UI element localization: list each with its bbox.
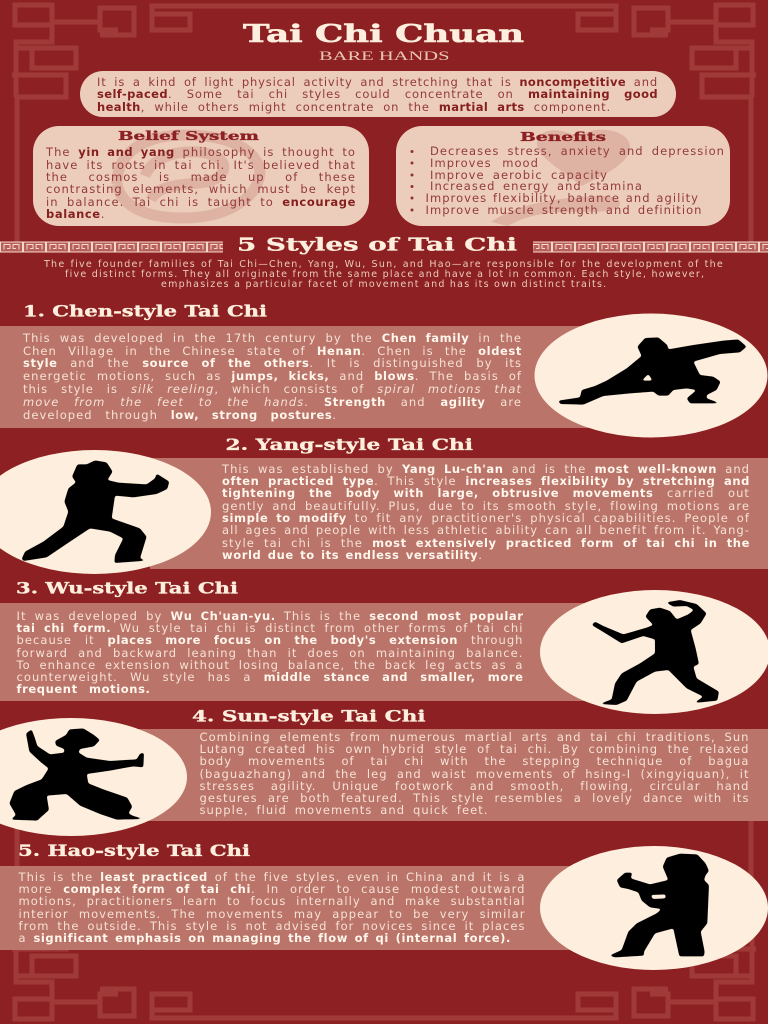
yang text: all ages and people with less athletic ability can all benefit from it. Yang- bbox=[222, 523, 750, 537]
sun text: (baguazhang) and the leg and waist movements of hsing-I (xingyiquan), it bbox=[200, 766, 750, 780]
benefits list: Increased energy and stamina bbox=[430, 179, 643, 193]
heading: yang: 2. Yang-style Tai Chi bbox=[226, 435, 473, 454]
subtitle: BARE HANDS bbox=[319, 48, 450, 63]
yang text bbox=[222, 462, 750, 562]
hao text: interior movements. The movements may appear to be very similar bbox=[18, 907, 526, 921]
wu text: To enhance extension without losing balance, the back leg acts as a bbox=[16, 658, 524, 672]
belief text bbox=[46, 145, 356, 221]
decorative key border left bbox=[0, 242, 223, 252]
wu text: because it places more focus on the body's extension through bbox=[16, 633, 524, 647]
intro panel bbox=[80, 71, 676, 117]
figure: chen bbox=[534, 314, 768, 438]
panel: yang band bbox=[150, 458, 768, 569]
title: Tai Chi Chuan bbox=[243, 19, 524, 48]
hao text: from the outside. This style is not advised for novices since it places bbox=[18, 919, 526, 933]
benefits list: Improve muscle strength and definition bbox=[426, 203, 702, 217]
chen text bbox=[22, 331, 522, 422]
hao text: more complex form of tai chi. In order to cause modest outward bbox=[18, 882, 526, 896]
panel: chen band bbox=[0, 326, 600, 428]
wu text: frequent motions. bbox=[16, 682, 150, 696]
intro description bbox=[44, 259, 724, 290]
heading: sun: 4. Sun-style Tai Chi bbox=[192, 707, 426, 726]
benefits list: Decreases stress, anxiety and depression bbox=[430, 144, 725, 158]
figure: wu bbox=[540, 590, 768, 714]
figure: yang bbox=[0, 450, 211, 574]
yang text: This was established by Yang Lu-ch'an and is the most well-known and bbox=[222, 462, 750, 476]
heading: benefits: Benefits bbox=[520, 129, 606, 144]
belief text: balance. bbox=[46, 207, 105, 221]
wu text bbox=[16, 609, 524, 696]
heading: belief system: Belief System bbox=[118, 128, 259, 143]
panel: benefits bbox=[396, 126, 730, 226]
heading: wu: 3. Wu-style Tai Chi bbox=[16, 578, 238, 597]
belief text: The yin and yang philosophy is thought to bbox=[46, 145, 356, 159]
figure: hao bbox=[540, 846, 768, 970]
yang text: often practiced type. This style increases flexibility by stretching and bbox=[222, 474, 750, 488]
heading: five styles: 5 Styles of Tai Chi bbox=[237, 236, 518, 256]
yang text: gently and beautifully. Plus, due to its smooth style, flowing motions are bbox=[222, 499, 750, 513]
intro description: emphasizes a particular facet of movement and has its own distinct traits. bbox=[161, 279, 607, 290]
panel: hao band bbox=[0, 866, 610, 950]
belief text: contrasting elements, which must be kept bbox=[46, 182, 356, 196]
yang text: world due to its endless versatility. bbox=[222, 548, 483, 562]
hao text bbox=[18, 870, 526, 945]
benefits list bbox=[426, 144, 725, 217]
hao text: a significant emphasis on managing the flow of qi (internal force). bbox=[18, 931, 511, 945]
chen text: style and the source of the others. It is distinguished by its bbox=[23, 356, 522, 370]
intro text bbox=[97, 75, 658, 114]
panel: belief system bbox=[33, 126, 369, 226]
sun text: stresses agility. Unique footwork and smooth, flowing, circular hand bbox=[200, 779, 750, 793]
yang text: tightening the body with large, obtrusive movements carried out bbox=[222, 486, 750, 500]
belief text: have its roots in tai chi. It's believed that bbox=[46, 158, 356, 172]
intro text: self-paced. Some tai chi styles could concentrate on maintaining good bbox=[97, 87, 658, 101]
intro description: The five founder families of Tai Chi—Chen, Yang, Wu, Sun, and Hao—are responsible for the development of the bbox=[44, 259, 724, 270]
hao text: motions, practitioners learn to focus internally and make substantial bbox=[18, 894, 526, 908]
icon: yin yang swirl watermark bbox=[112, 130, 266, 224]
chen text: energetic motions, such as jumps, kicks, and blows. The basis of bbox=[23, 369, 522, 383]
wu text: tai chi form. Wu style tai chi is distinct from other forms of tai chi bbox=[16, 621, 523, 635]
figure: sun bbox=[0, 718, 187, 836]
sun text bbox=[200, 730, 750, 817]
wu text: counterweight. Wu style has a middle stance and smaller, more bbox=[16, 670, 524, 684]
icon: heart watermark bbox=[491, 130, 630, 226]
sun text: body movements of tai chi with the stepping technique of bagua bbox=[200, 754, 750, 768]
chen text: Chen Village in the Chinese state of Henan. Chen is the oldest bbox=[23, 344, 522, 358]
panel: sun band bbox=[130, 729, 768, 821]
chen text: developed through low, strong postures. bbox=[23, 408, 337, 422]
sun text: supple, fluid movements and quick feet. bbox=[200, 803, 488, 817]
heading: chen: 1. Chen-style Tai Chi bbox=[23, 302, 267, 321]
hao text: This is the least practiced of the five styles, even in China and it is a bbox=[18, 870, 526, 884]
chen text: move from the feet to the hands. Strength and agility are bbox=[23, 395, 522, 409]
heading: hao: 5. Hao-style Tai Chi bbox=[18, 841, 250, 860]
benefits list: Improves mood bbox=[430, 156, 539, 170]
chen text: This was developed in the 17th century by the Chen family in the bbox=[23, 331, 522, 345]
intro text: health, while others might concentrate on the martial arts component. bbox=[97, 100, 611, 114]
bullets bbox=[410, 150, 414, 212]
chen text: this style is silk reeling, which consists of spiral motions that bbox=[23, 382, 522, 396]
intro text: It is a kind of light physical activity and stretching that is noncompetitive and bbox=[97, 75, 658, 89]
sun text: Combining elements from numerous martial arts and tai chi traditions, Sun bbox=[200, 730, 750, 744]
belief text: the cosmos is made up of these bbox=[46, 170, 356, 184]
yang text: style tai chi is the most extensively practiced form of tai chi in the bbox=[222, 536, 750, 550]
wu text: It was developed by Wu Ch'uan-yu. This is the second most popular bbox=[16, 609, 524, 623]
sun text: Lutang created his own hybrid style of tai chi. By combining the relaxed bbox=[200, 742, 750, 756]
benefits list: Improve aerobic capacity bbox=[430, 168, 608, 182]
intro description: five distinct forms. They all originate from the same place and have a lot in common. Each style, however, bbox=[65, 269, 705, 280]
belief text: in balance. Tai chi is taught to encourage bbox=[46, 195, 356, 209]
benefits list: Improves flexibility, balance and agility bbox=[426, 191, 699, 205]
yang text: simple to modify to fit any practitioner's physical capabilities. People of bbox=[222, 511, 750, 525]
decorative key border right bbox=[533, 242, 768, 252]
sun text: gestures are both featured. This style resembles a lovely dance with its bbox=[200, 791, 750, 805]
panel: wu band bbox=[0, 603, 610, 701]
wu text: forward and backward leaning than it does on maintaining balance. bbox=[16, 646, 524, 660]
